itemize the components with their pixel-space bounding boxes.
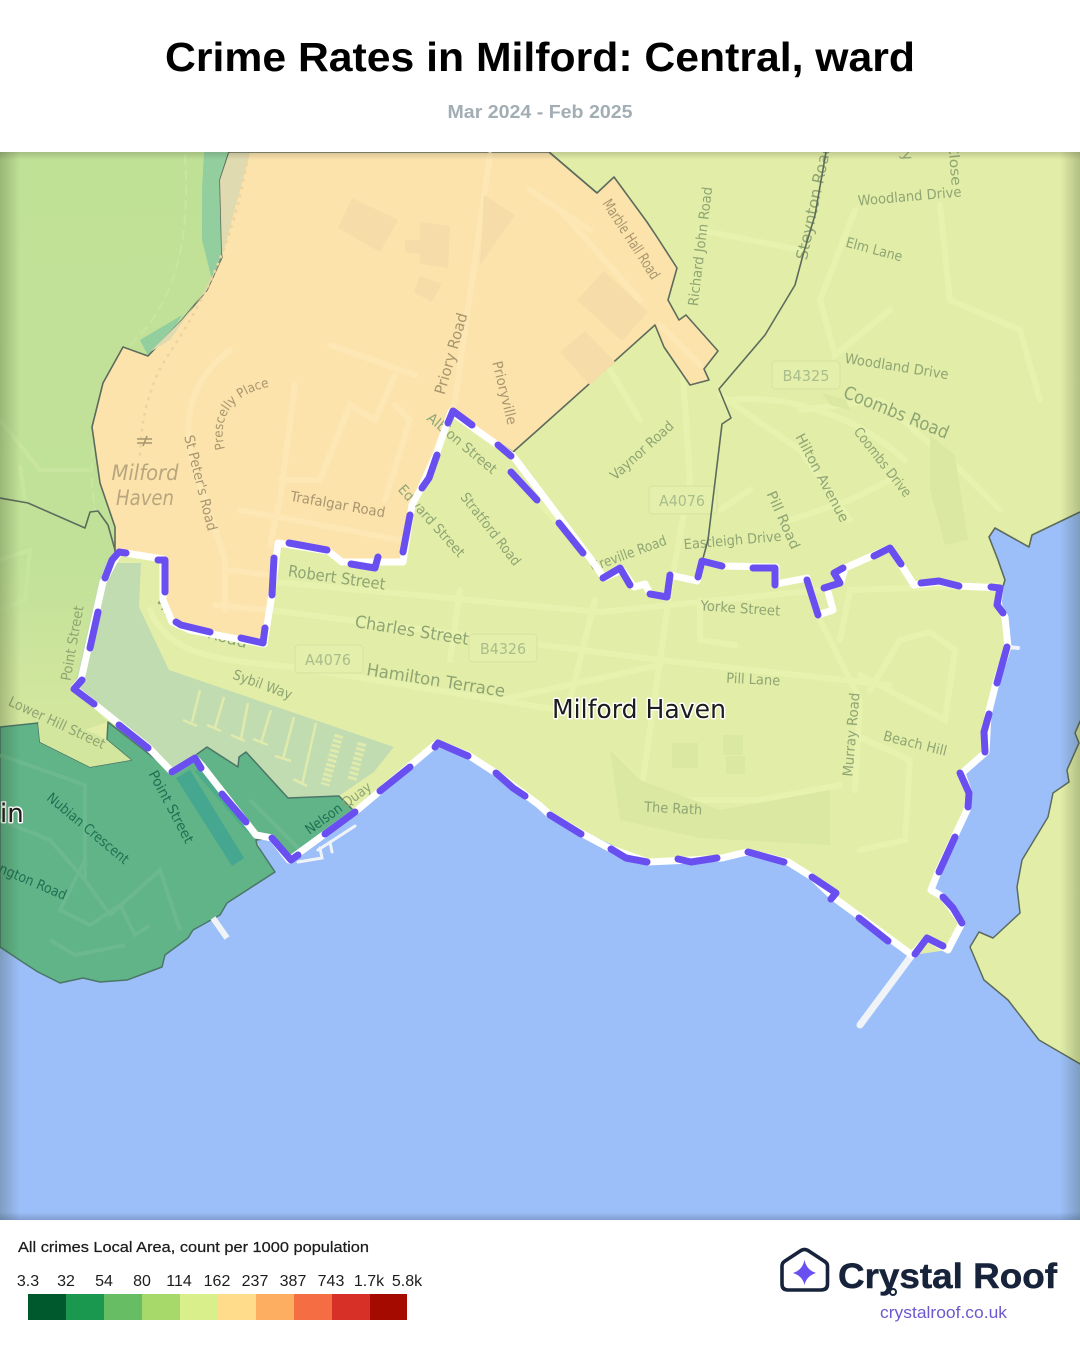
street labels: Albion Street — [423, 410, 500, 478]
logo url: crystalroof.co.uk — [880, 1304, 1008, 1322]
street labels: Elm Lane — [844, 235, 904, 265]
street labels: Coombs Road — [840, 382, 952, 444]
street labels: Murray Road — [840, 692, 864, 777]
teal slipway — [176, 770, 244, 866]
street labels: Nelson Quay — [302, 779, 375, 838]
street labels: Stratford Road — [457, 490, 524, 569]
street labels: Trafalgar Road — [288, 489, 386, 521]
ward boundary lines: neighbouring wards — [0, 152, 1080, 593]
label: Milford Haven district (italic): Haven — [116, 486, 174, 510]
street labels: Woodland Drive — [857, 185, 962, 210]
legend title: All crimes Local Area, count per 1000 population — [18, 1239, 369, 1256]
focus ward boundary: white base — [74, 412, 1008, 955]
icon: house with star — [782, 1250, 828, 1290]
road shields: B4325 — [782, 367, 830, 385]
lower hill street land wedge — [38, 718, 131, 767]
street labels: Charles Street — [353, 612, 470, 650]
street labels: Beach Hill — [881, 728, 948, 760]
logo: Crystal Roof — [782, 1250, 1057, 1322]
harbour-side road — [339, 735, 437, 812]
piers and jetties — [213, 647, 1018, 1025]
harbour — [74, 563, 394, 798]
street labels: Robert Street — [287, 561, 387, 594]
land: green woodland ward — [0, 152, 212, 730]
street labels: The Rath — [643, 799, 703, 819]
street labels: St Peter's Road — [180, 434, 219, 533]
street labels: Eastleigh Drive — [683, 529, 782, 553]
teal woodland strip — [202, 152, 229, 280]
label: Milford Haven town: Milford Haven — [552, 695, 726, 725]
street labels: Pill Lane — [726, 671, 781, 689]
roads: land — [150, 205, 1040, 850]
legend scale values: 3.3 — [17, 1273, 39, 1290]
logo y-descender ring — [890, 1289, 896, 1295]
street labels: Prescelly Place — [214, 380, 268, 450]
street labels: Vaynor Road — [607, 418, 677, 484]
legend scale values: 80 — [133, 1273, 151, 1290]
subtitle: date range: Mar 2024 - Feb 2025 — [448, 101, 632, 122]
marina pontoons — [183, 690, 362, 786]
road shields: B4326 — [480, 640, 526, 658]
street labels: Marble Hall Road — [599, 196, 664, 283]
ward: orange high-crime area — [92, 152, 718, 644]
logo wordmark: Crystal Roof — [838, 1257, 1057, 1296]
legend scale values — [17, 1273, 423, 1290]
woodland paths — [92, 155, 186, 510]
beige railway verge — [150, 153, 250, 352]
street labels: Sybil Way — [231, 667, 294, 703]
legend scale values: 32 — [57, 1273, 75, 1290]
street labels: Greville Road — [588, 533, 669, 575]
legend — [17, 1239, 423, 1320]
street labels: Point Street — [145, 768, 197, 847]
dark green low-crime ward — [0, 722, 355, 983]
label: Milford Haven district (italic) — [112, 464, 179, 506]
street labels: Edward Street — [394, 482, 468, 561]
street labels: Richard John Road — [686, 186, 716, 307]
street labels: Prioryville — [488, 360, 520, 427]
icon: railway station — [137, 436, 152, 446]
road shields: A4076 — [659, 492, 705, 510]
legend scale values: 237 — [242, 1273, 268, 1290]
street labels: Yorke Street — [699, 598, 781, 620]
legend scale values: 54 — [95, 1273, 113, 1290]
street labels: Priory Road — [431, 311, 471, 396]
legend scale values: 743 — [318, 1273, 344, 1290]
street labels: Pill Road — [763, 489, 803, 552]
road shields — [295, 361, 840, 673]
legend colour bar — [28, 1294, 407, 1320]
street labels: Steynton Road — [792, 142, 835, 262]
legend scale values: 1.7k — [354, 1273, 385, 1290]
label: Victoria Road: Victoria Road — [158, 600, 246, 648]
legend scale values: 5.8k — [392, 1273, 423, 1290]
road shields: A4076 — [305, 651, 351, 669]
street labels: Woodland Drive — [844, 351, 950, 383]
land: main — [0, 152, 1080, 970]
street labels: y — [898, 149, 916, 163]
label: Milford Haven district (italic): Milford — [112, 461, 179, 485]
land: east shore — [970, 717, 1080, 1065]
street labels: Lower Hill Street — [6, 694, 108, 753]
street labels — [0, 152, 1004, 924]
map edge vignette — [0, 152, 1080, 1220]
map panel — [0, 152, 1080, 1220]
street labels: Hilton Avenue — [791, 431, 852, 525]
street labels: Nubian Crescent — [43, 790, 132, 868]
label: clipped place name at map edge: in — [0, 799, 24, 829]
street labels: Point Street — [59, 604, 88, 682]
park and woodland patches — [637, 401, 958, 803]
roads in orange area — [188, 155, 700, 610]
street labels: Coombs Drive — [850, 425, 914, 501]
street labels: Hamilton Terrace — [365, 660, 506, 702]
legend scale values: 162 — [204, 1273, 230, 1290]
railway dots — [140, 155, 248, 460]
legend scale values: 387 — [280, 1273, 306, 1290]
roads in dark green ward — [0, 755, 300, 955]
legend scale values: 114 — [166, 1273, 192, 1290]
street labels: Close — [944, 143, 964, 186]
title: Crime Rates in Milford: Central, ward — [165, 34, 915, 80]
buildings — [482, 195, 615, 385]
focus ward boundary: purple dashes — [74, 411, 1007, 954]
